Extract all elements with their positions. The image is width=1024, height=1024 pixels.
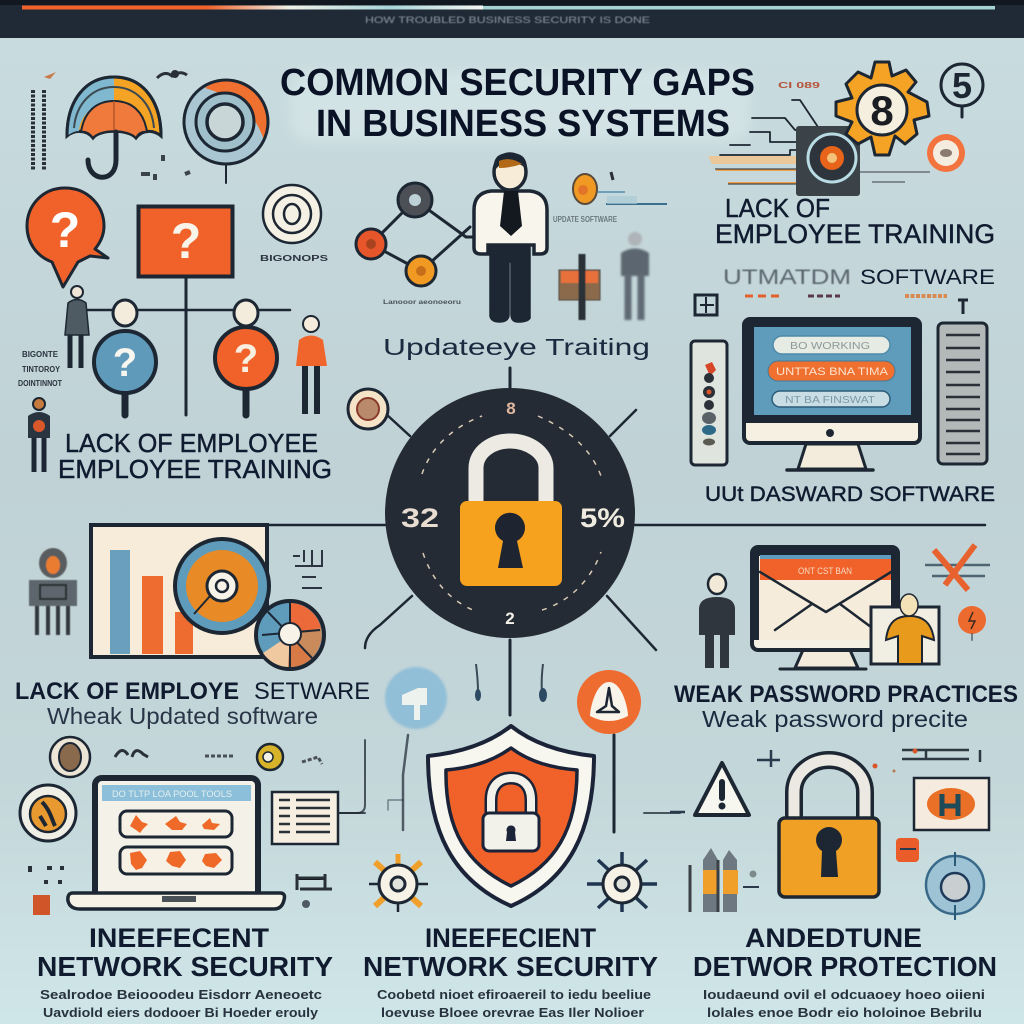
icon: email monitor [752,547,898,669]
label: outdated software heading [723,266,995,289]
small glyphs beside chart [293,550,323,588]
label: inefficient network security center: NETWORK SECURITY [363,951,658,982]
icon: amber sun gear [369,854,428,912]
pill: light blue: NT BA FINSWAT [785,395,875,406]
small caption left: BIGONTE [22,350,59,359]
icon: umbrella [67,77,161,177]
pill: white [773,336,890,354]
label: outdated password software: UUt DASWARD SOFTWARE [705,483,995,506]
label: inefficient network security center: INEEFECIENT [425,923,596,953]
small caption left: DOINTINNOT [18,379,62,388]
icon: padlock [460,441,562,586]
header subtitle: HOW TROUBLED BUSINESS SECURITY IS DONE [365,15,650,25]
field: second row [120,847,232,874]
label: inefficient network security left: NETWORK SECURITY [37,951,333,982]
label: inefficient network security left [37,923,333,1020]
caption: left description [40,987,322,1020]
icon: amber ring badge [20,785,76,841]
label: lack of employee training right: EMPLOYEE TRAINING [715,219,995,249]
icon: navy sun gear [587,852,657,912]
icon: orange coin with bars: UPDATE SOFTWARE [553,215,618,224]
icon: question board [138,206,232,276]
icon: shield with lock [428,726,594,906]
caption: right description: lolales enoe Bodr eio holoinoe Bebrilu [707,1005,982,1020]
central hub with padlock [385,388,635,638]
icon: small round badge left of hub [348,389,388,429]
icon: small orange block [896,838,919,862]
title: COMMON SECURITY GAPS [280,62,755,104]
icon: laptop: DO TLTP LOA POOL TOOLS [112,789,232,799]
icon: small database box [695,295,717,315]
label: weak password practices [674,681,1018,732]
icon: dark person by email [699,574,735,668]
icon: laptop log panel [272,792,365,844]
icon: gear number eight [836,62,929,155]
icon: orange warning badge [577,670,641,832]
bar: blue [110,550,130,654]
label: lack of employee software: Wheak Updated software [47,703,318,729]
icon: blue question person: ? [113,341,137,385]
small marks around umbrella [33,70,190,180]
icon: chart target [175,539,269,633]
icon: pencils [690,848,759,912]
metric: left number: 32 [401,503,439,533]
chart: bar chart panel [91,525,324,669]
caption: center description: loevuse Bloee orevrae Eas Iler Nolioer [381,1005,644,1020]
icon: orange question person: ? [234,337,258,381]
small caption left [18,350,62,388]
label: inadequate network protection right: DETWOR PROTECTION [693,951,997,982]
icon: faded grey person [621,232,649,320]
pill: white: BO WORKING [790,341,870,352]
icon: number five badge: 5 [952,65,972,106]
label: inefficient network security center [363,923,658,1020]
label: updated training center: Updateeye Traiting [383,334,650,360]
icon: person portrait card [871,594,939,664]
title: IN BUSINESS SYSTEMS [316,103,730,145]
small note near gear: CI 089 [778,81,821,90]
caption: center description: Coobetd nioet efiroaereil to iedu beeliue [377,987,651,1002]
icon: small target with caption: BIGONOPS [260,254,329,263]
icon: target dial [184,80,268,183]
icon: blue question person [94,300,156,415]
header bar [0,0,1024,38]
label: lack of employee software: LACK OF EMPLOYE [15,678,239,705]
bar: orange short [175,612,193,654]
label: outdated software heading: SOFTWARE [860,266,995,289]
label: inadequate network protection right [693,923,997,1020]
icon: orange question person [215,300,277,415]
icon: left device panel [691,341,727,465]
icon: orange alert dot [958,606,986,640]
icon: grey person left [65,286,89,368]
icon: striped badge [50,737,90,777]
field: first row [120,811,232,837]
caption: right description [703,987,985,1020]
icon: warning triangle [670,750,780,815]
small caption left: TINTOROY [22,365,61,374]
connector pins near shield [340,664,680,813]
icon: right server rack [938,323,987,464]
metric: right percent: 5% [580,503,625,533]
icon: blue ring shield [926,852,984,920]
icon: orange card [914,778,989,830]
icon: question speech bubble [27,188,108,287]
label: lack of employee training right [715,193,995,249]
label: lack of employee training right: LACK OF [725,193,830,223]
caption: center description [377,987,651,1020]
icon: question speech bubble: ? [50,202,80,258]
metric: top digit: 8 [506,399,516,418]
icon: central person with tie [474,153,547,322]
caption under network: Lanooor aeonoeoru [383,300,461,306]
icon: orange radar [927,134,965,172]
icon: hooded person [29,548,77,635]
label: weak password practices: Weak password precite [702,706,968,732]
metric: bottom digit: 2 [505,609,515,628]
icon: amber padlock [779,760,879,897]
label: inadequate network protection right: ANDEDTUNE [745,923,922,953]
caption: left description: Sealrodoe Beiooodeu Eisdorr Aeneoetc [40,987,322,1002]
label: lack of employee software: SETWARE [254,678,370,705]
caption: right description: Ioudaeund ovil el odcuaoey hoeo oiieni [703,987,985,1002]
icon: small target with caption [260,185,329,263]
pill: orange [768,361,895,381]
icon: gear number eight: 8 [870,87,894,134]
pill: light blue [772,391,890,407]
bar: orange mid [142,576,163,654]
icon: briefcase figure [559,254,600,320]
icon: question board: ? [171,213,201,269]
icon: shield padlock [483,778,539,851]
icon: pie dial [256,601,324,669]
icon: gear and lens machine [708,62,983,196]
label: outdated software heading: UTMATDM [723,266,851,289]
icon: small dark person with badge [28,398,50,472]
label: lack of employee training left: LACK OF EMPLOYEE [65,428,318,458]
icon: email monitor: ONT CST BAN [798,566,852,576]
label: inefficient network security left: INEEFECENT [89,923,270,953]
caption: left description: Uavdiold eiers dodooer Bi Hoeder erouly [43,1005,319,1020]
icon: desktop monitor with pills [744,319,920,470]
org chart: question board and people [88,206,290,415]
small smudges under software heading [745,296,968,314]
icon: yellow ring badge [257,744,283,770]
icon: crossed out lines [925,545,990,590]
icon: number five badge [941,64,983,117]
label: lack of employee software [15,678,370,729]
title [280,62,755,145]
small glyphs top right of lock [872,748,980,772]
icon: network nodes [356,183,474,286]
icon: laptop [68,778,284,909]
label: lack of employee training left: EMPLOYEE TRAINING [58,454,332,484]
icon: blue question badge [385,667,447,830]
label: lack of employee training left [58,428,332,484]
small glyphs around laptop [30,750,332,915]
icon: orange coin with bars [553,172,667,224]
icon: orange person right [296,316,327,414]
connector lines from hub [268,368,985,715]
laptop base [68,893,284,909]
pill: orange: UNTTAS BNA TIMA [776,366,889,378]
